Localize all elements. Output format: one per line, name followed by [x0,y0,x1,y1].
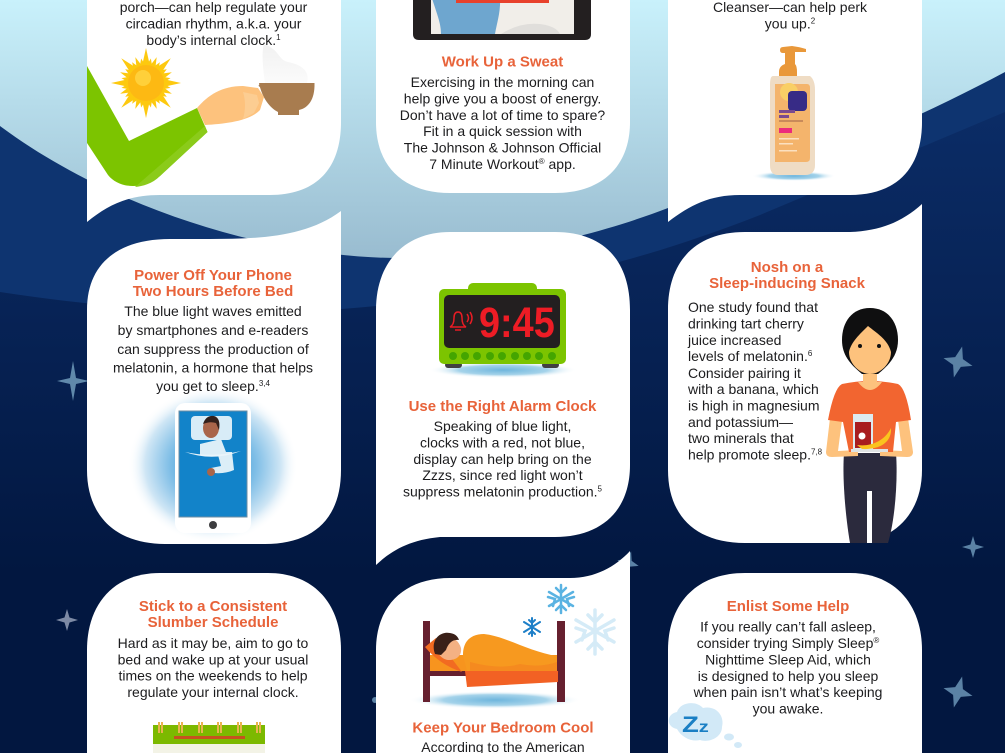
body text: enlist some help: If you really can’t fall asleep, [700,618,876,634]
body text: alarm clock: Speaking of blue light, [434,418,571,434]
body text: snack: drinking tart cherry [688,316,804,332]
panel: consistent slumber schedule [87,573,341,753]
panel: sleep-inducing snack [668,204,922,543]
illustration: woman holding juice and banana [826,308,913,543]
heading: slumber schedule: Stick to a Consistent [139,598,287,615]
body text: snack: and potassium— [688,414,793,430]
body text: alarm clock: 5 [598,484,603,494]
body text: snack: Consider pairing it [688,365,801,381]
body text: sunlight: 1 [276,33,281,42]
body text: work up a sweat: Exercising in the morning can [411,74,594,90]
body text: enlist some help: you awake. [753,700,823,716]
moon / dawn sky shape [0,0,1005,258]
body text: alarm clock: display can help bring on the [413,451,592,467]
body text: work up a sweat: help give you a boost of energy. [404,90,601,106]
heading: alarm clock: Use the Right Alarm Clock [409,398,597,415]
illustration: cleanser bottle [752,46,836,181]
icon: Zz sleep cloud: Zz [682,713,709,737]
illustration: glowing phone with sleeping man [128,387,298,543]
body text: cleanser: you up. [765,16,816,32]
illustration: arm holding coffee cup [87,44,315,187]
panel: keep bedroom cool [376,551,630,753]
illustration: person sleeping in bed with snowflakes [409,585,614,709]
body text: work up a sweat: The Johnson & Johnson Official [404,140,601,156]
body text: snack: with a banana, which [687,381,819,397]
panel: morning cleanser [668,0,922,222]
body text: alarm clock: Zzzs, since red light won’t [422,467,583,483]
body text: power off your phone: by smartphones and e-readers [118,322,308,338]
heading: enlist some help: Enlist Some Help [727,598,849,615]
body text: work up a sweat: app. [545,156,576,172]
body text: snack: levels of melatonin. [688,348,813,364]
body text: alarm clock: suppress melatonin production. [403,484,603,500]
body text: snack: 7,8 [811,448,823,456]
clock time: 9:45 [479,298,555,347]
icon: bell [450,312,466,330]
body text: snack: help promote sleep. [688,446,823,462]
body text: sunlight: circadian rhythm, a.k.a. your [126,16,302,32]
body text: power off your phone: The blue light waves emitted [124,303,302,319]
heading: slumber schedule: Slumber Schedule [148,614,278,631]
body text: work up a sweat: 7 Minute Workout [429,156,576,172]
panel: power off your phone [87,211,341,544]
stars [56,343,984,711]
illustration: alarm clock [429,283,577,378]
body text: power off your phone: melatonin, a hormone that helps [113,360,313,376]
illustration: tablet with workout app [413,0,591,40]
body text: snack: One study found that [688,299,818,315]
icon: sun [111,48,181,118]
body text: enlist some help: consider trying Simply Sleep [697,635,879,651]
body text: snack: 6 [808,349,813,358]
body text: work up a sweat: Fit in a quick session with [423,123,582,139]
panel: right alarm clock [376,232,630,565]
heading: snack: Nosh on a [751,259,824,276]
icon: Zz sleep cloud [669,703,742,748]
body text: snack: is high in magnesium [688,398,820,414]
heading: snack: Sleep-inducing Snack [709,275,866,292]
panel: work up a sweat [376,0,630,193]
body text: work up a sweat: ® [539,157,545,166]
body text: slumber schedule: bed and wake up at your usual [118,652,308,668]
panel: enlist some help [668,573,922,753]
body text: power off your phone: can suppress the production of [117,341,309,357]
body text: alarm clock: clocks with a red, not blue, [420,434,585,450]
heading: power off your phone: Power Off Your Phone [134,267,292,284]
body text: enlist some help: when pain isn’t what’s keeping [693,684,882,700]
body text: enlist some help: ® [873,636,879,645]
body text: slumber schedule: times on the weekends to help [118,668,308,684]
body text: work up a sweat: Don’t have a lot of time to spare? [400,107,605,123]
body text: snack: juice increased [687,332,781,348]
body text: slumber schedule: regulate your internal clock. [127,684,299,700]
body text: slumber schedule: Hard as it may be, aim to go to [118,635,309,651]
illustration: calendar [153,722,265,753]
body text: power off your phone: 3,4 [259,379,270,388]
body text: cleanser: 2 [811,16,816,26]
body text: enlist some help: Nighttime Sleep Aid, which [705,652,871,668]
panel: morning sunlight [87,0,341,222]
body text: enlist some help: is designed to help you sleep [698,668,878,684]
heading: power off your phone: Two Hours Before Bed [133,283,293,300]
heading: work up a sweat: Work Up a Sweat [442,54,563,70]
body text: snack: two minerals that [688,430,794,446]
body text: power off your phone: you get to sleep. [156,378,270,394]
body text: sunlight: body’s internal clock. [146,32,281,48]
heading: bedroom cool: Keep Your Bedroom Cool [412,720,594,736]
